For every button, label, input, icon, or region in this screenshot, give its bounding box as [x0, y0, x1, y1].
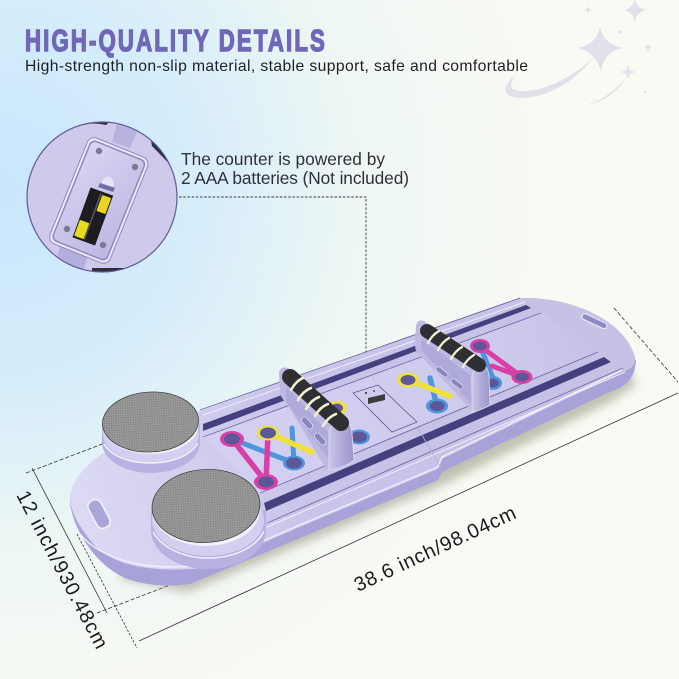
board top face [70, 298, 635, 570]
left resistance pattern [220, 401, 370, 490]
decorative stars and swoosh [506, 0, 653, 105]
left handle [279, 368, 354, 471]
lower rotating disc [150, 467, 266, 569]
right handle [415, 320, 490, 412]
callout: battery text: The counter is powered by [181, 149, 385, 169]
fitness board [70, 298, 636, 586]
width dimension label: 12 inch/930.48cm [12, 487, 112, 653]
title: HIGH-QUALITY DETAILS [25, 23, 327, 58]
rails and grooves [200, 298, 625, 527]
grip slots [86, 497, 112, 531]
board side [70, 298, 636, 586]
callout: battery text: 2 AAA batteries (Not included) [181, 168, 409, 188]
right resistance pattern [397, 339, 532, 414]
subtitle: High-strength non-slip material, stable support, safe and comfortable [25, 58, 528, 75]
callout leader line [179, 197, 366, 393]
length dimension label: 38.6 inch/98.04cm [351, 502, 520, 597]
counter display [353, 385, 417, 432]
board shadow [120, 370, 636, 592]
callout: battery text [181, 149, 409, 188]
battery compartment detail circle [27, 120, 182, 280]
upper rotating disc [101, 390, 200, 473]
dimension lines [26, 308, 678, 648]
